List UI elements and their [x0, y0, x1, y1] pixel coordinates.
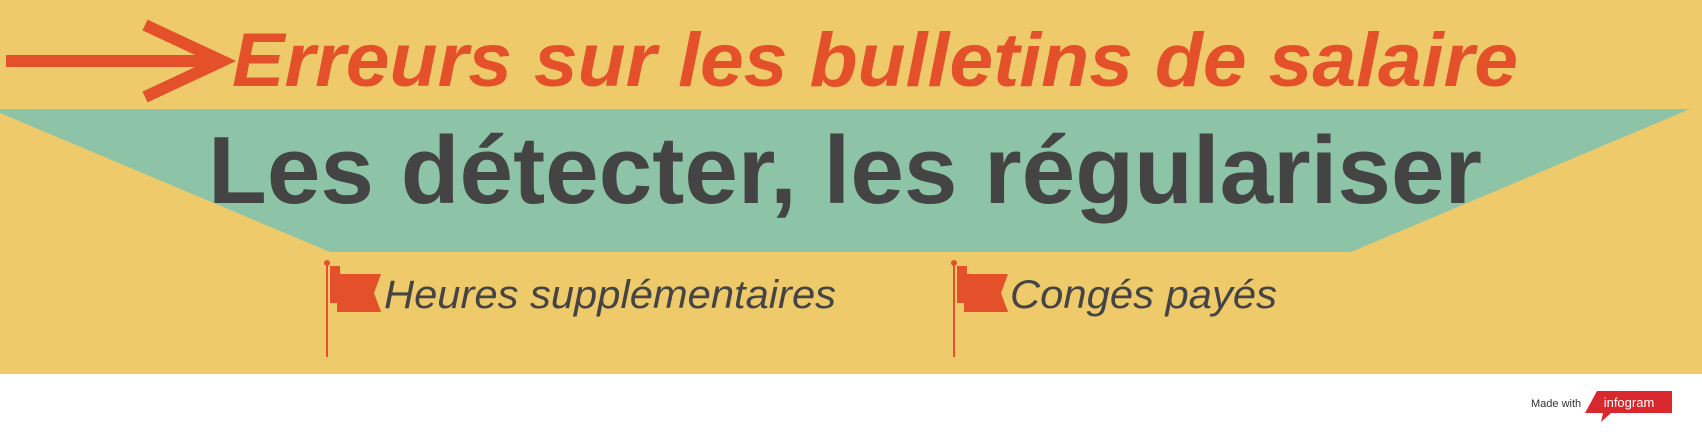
icon: flag	[951, 260, 1008, 357]
item: heures supplémentaires	[324, 260, 836, 357]
subtitle: Les détecter, les régulariser	[208, 117, 1482, 224]
item: congés payés: Congés payés	[1010, 273, 1277, 317]
footer logo: Made with	[1531, 398, 1581, 410]
arrow icon	[6, 25, 222, 97]
icon: flag	[324, 260, 381, 357]
item: congés payés	[951, 260, 1277, 357]
footer logo: infogram	[1604, 395, 1654, 410]
teal banner	[0, 109, 1690, 252]
footer logo	[1531, 391, 1672, 422]
item: heures supplémentaires: Heures supplémentaires	[384, 273, 836, 317]
title: Erreurs sur les bulletins de salaire	[232, 18, 1518, 103]
